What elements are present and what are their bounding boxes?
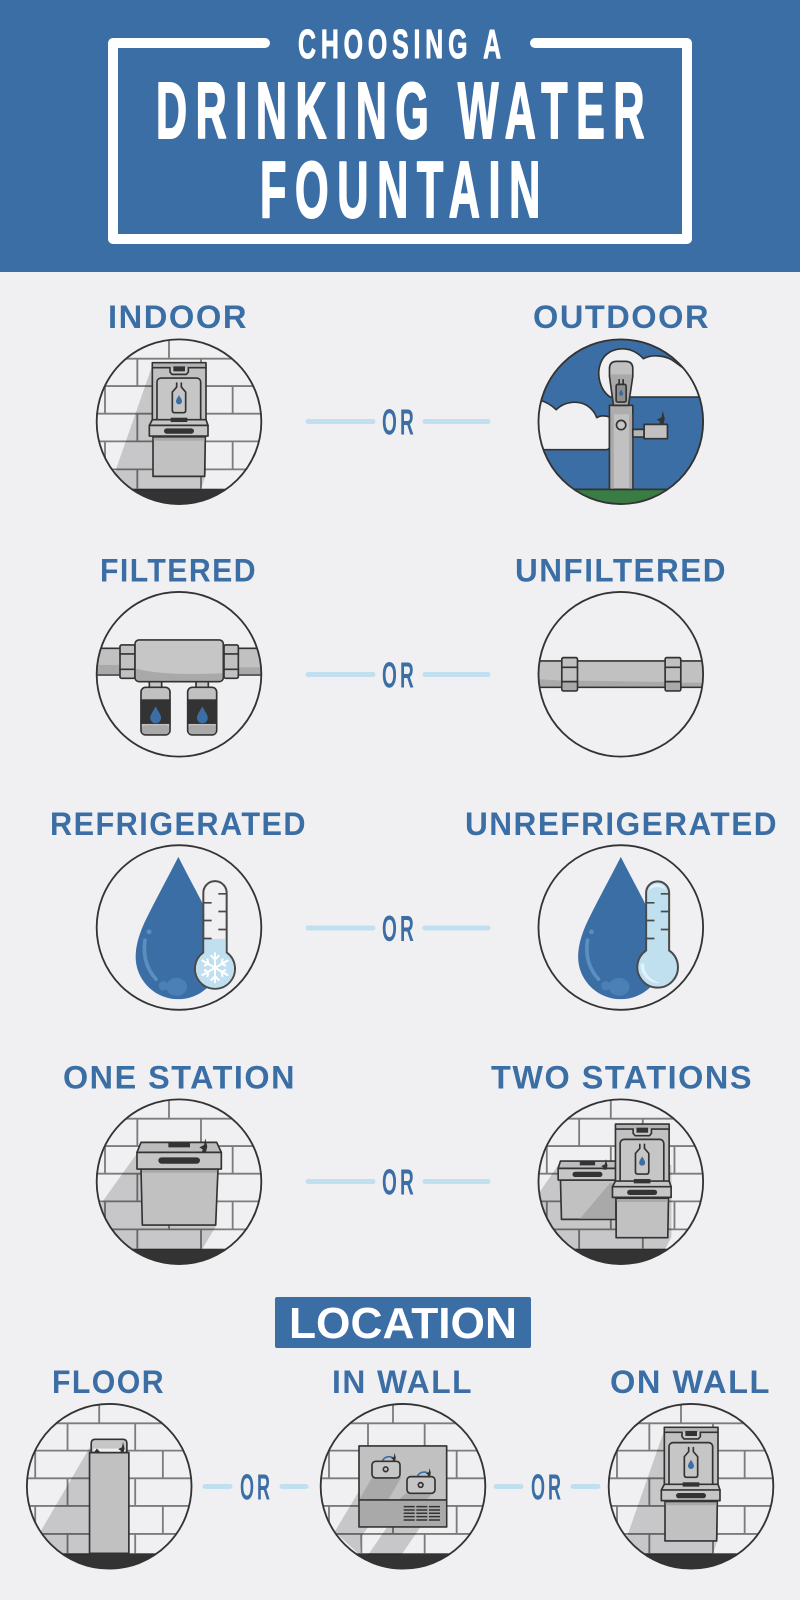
title frame [113,43,687,239]
heading: in wall: IN WALL [332,1364,473,1400]
or connector: OR [531,1466,564,1508]
icon: outdoor fountain [538,338,704,505]
heading: unrefrigerated: UNREFRIGERATED [465,806,778,842]
heading: floor: FLOOR [52,1364,165,1400]
heading: one station: ONE STATION [63,1060,296,1096]
heading: filtered: FILTERED [100,552,257,588]
heading: refrigerated: REFRIGERATED [50,806,307,842]
panel: filtered or unfiltered [90,552,727,757]
icon: unfiltered pipe [530,592,710,757]
header banner [0,0,800,272]
or connector: OR [382,908,417,949]
or connector: OR [382,1162,417,1202]
panel: refrigerated or unrefrigerated [50,806,778,1010]
or connector: OR [240,1466,273,1508]
heading: outdoor: OUTDOOR [533,299,710,335]
location heading: LOCATION [289,1299,517,1348]
icon: floor fountain [23,1400,196,1573]
or connector [496,1466,598,1508]
icon: in wall fountain [316,1400,490,1573]
panel: indoor or outdoor [92,299,713,509]
heading: unfiltered: UNFILTERED [515,552,727,588]
heading: indoor: INDOOR [108,299,248,335]
icon: cold water drop and thermometer [97,845,261,1010]
title: FOUNTAIN [260,145,549,234]
panel: location options [23,1364,778,1573]
title [156,21,653,234]
icon: one station fountain [92,1095,266,1269]
title: CHOOSING A [298,21,506,67]
or connector [205,1466,306,1508]
or connector: OR [382,654,417,696]
icon: indoor fountain [92,335,266,509]
or connector: OR [382,402,417,442]
icon: two station fountain [534,1095,707,1269]
icon: on wall fountain [604,1400,778,1573]
icon: unchilled water drop and thermometer [538,845,703,1010]
icon: filtered pipe [90,592,268,757]
heading: on wall: ON WALL [610,1364,771,1400]
heading: two stations: TWO STATIONS [491,1060,753,1096]
panel: one station or two stations [63,1060,753,1269]
